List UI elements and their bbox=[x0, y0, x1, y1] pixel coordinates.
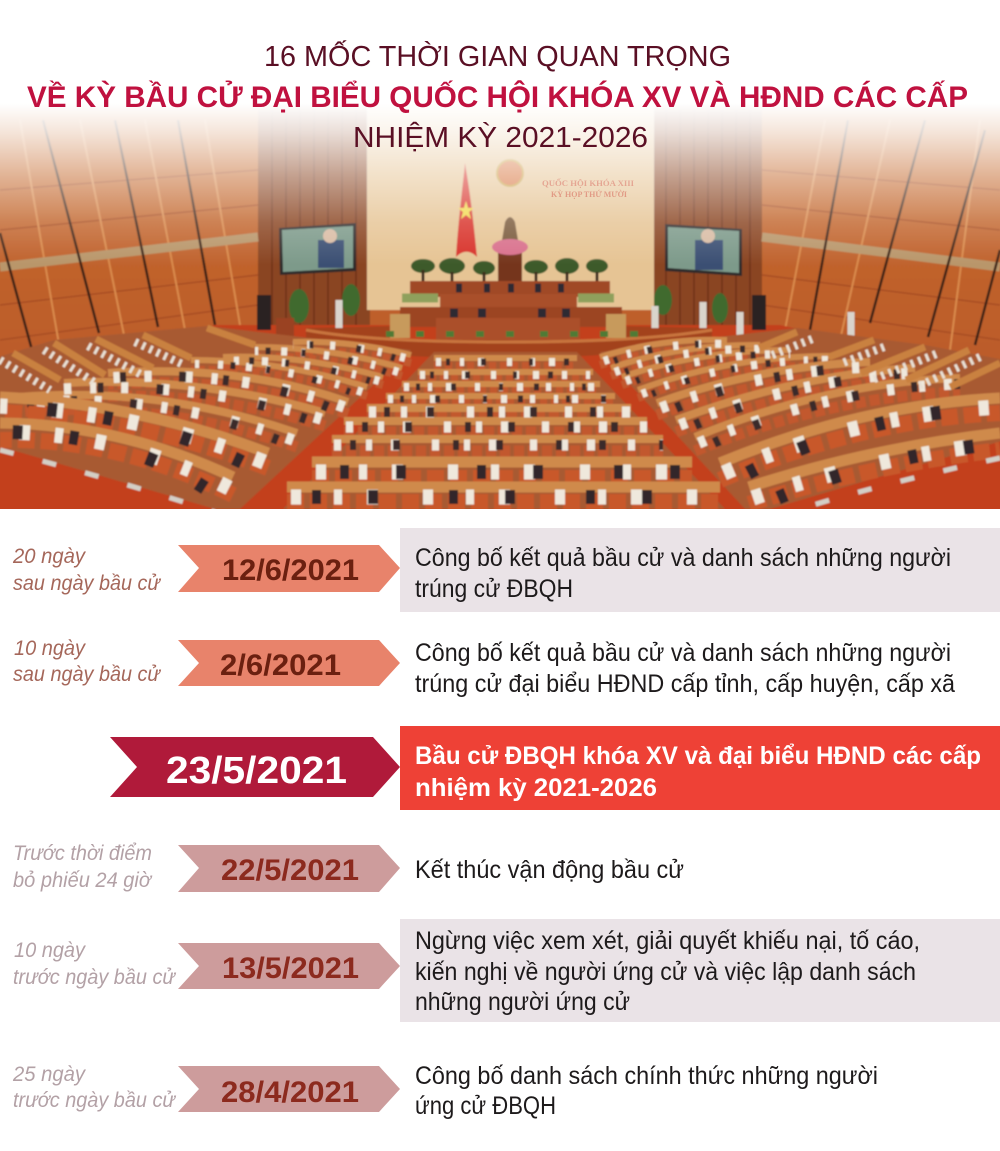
date arrow bbox=[178, 640, 400, 686]
title: VỀ KỲ BẦU CỬ ĐẠI BIỂU QUỐC HỘI KHÓA XV VÀ HĐND CÁC CẤP bbox=[27, 80, 968, 114]
date: 23/5/2021 bbox=[166, 750, 347, 792]
row note: 25 ngày bbox=[12, 1063, 86, 1086]
row note: Trước thời điểm bbox=[13, 842, 152, 865]
description: Công bố danh sách chính thức những người bbox=[415, 1062, 878, 1090]
national emblem bbox=[497, 160, 523, 186]
description bbox=[415, 544, 951, 603]
bust and pedestal bbox=[492, 217, 528, 291]
title: 16 MỐC THỜI GIAN QUAN TRỌNG bbox=[264, 39, 731, 73]
description panel bbox=[400, 919, 1000, 1022]
date arrow bbox=[178, 545, 400, 592]
front floor and bottom seats bbox=[0, 450, 1000, 512]
date: 12/6/2021 bbox=[222, 554, 359, 587]
date arrow bbox=[178, 943, 400, 989]
row note bbox=[13, 842, 153, 892]
description: những người ứng cử bbox=[415, 988, 630, 1016]
title: NHIỆM KỲ 2021-2026 bbox=[353, 121, 648, 154]
date: 28/4/2021 bbox=[221, 1076, 359, 1109]
row note: 20 ngày bbox=[12, 545, 86, 568]
row note: 10 ngày bbox=[14, 939, 86, 962]
description: Bầu cử ĐBQH khóa XV và đại biểu HĐND các cấp bbox=[415, 742, 981, 770]
date arrow bbox=[178, 1066, 400, 1112]
timeline row: 28/4/2021 bbox=[12, 1062, 878, 1120]
white fade over photo top bbox=[0, 0, 1000, 265]
row note: 10 ngày bbox=[14, 637, 86, 660]
description: nhiệm kỳ 2021-2026 bbox=[415, 774, 657, 802]
seating blocks bbox=[0, 326, 1000, 509]
row note bbox=[12, 1063, 177, 1112]
potted plants bbox=[411, 258, 608, 282]
left screen bbox=[279, 223, 356, 275]
date arrow bbox=[178, 845, 400, 892]
row note: trước ngày bầu cử bbox=[13, 1089, 177, 1112]
description bbox=[415, 639, 955, 698]
description: Ngừng việc xem xét, giải quyết khiếu nại, tố cáo, bbox=[415, 927, 920, 955]
description: Công bố kết quả bầu cử và danh sách những người bbox=[415, 639, 951, 667]
description bbox=[415, 1062, 878, 1120]
highlight panel bbox=[400, 726, 1000, 810]
row note: trước ngày bầu cử bbox=[13, 966, 177, 989]
outer raised desks bbox=[0, 328, 1000, 390]
date: 22/5/2021 bbox=[221, 854, 359, 887]
row note: bỏ phiếu 24 giờ bbox=[13, 869, 153, 892]
floor bbox=[0, 325, 1000, 515]
date: 2/6/2021 bbox=[220, 649, 341, 682]
description: trúng cử ĐBQH bbox=[415, 575, 573, 603]
title bbox=[27, 39, 968, 154]
date: 13/5/2021 bbox=[222, 952, 359, 985]
description: kiến nghị về người ứng cử và việc lập danh sách bbox=[415, 958, 916, 986]
description: Kết thúc vận động bầu cử bbox=[415, 856, 684, 884]
row note: sau ngày bầu cử bbox=[13, 572, 162, 595]
description: trúng cử đại biểu HĐND cấp tỉnh, cấp huyện, cấp xã bbox=[415, 670, 955, 698]
right screen bbox=[665, 224, 742, 276]
hall walls bbox=[0, 110, 1000, 360]
row note bbox=[12, 545, 162, 595]
wall caption bbox=[542, 178, 635, 199]
middle rows bbox=[19, 362, 960, 451]
timeline row: 22/5/2021 bbox=[13, 842, 684, 892]
description bbox=[415, 742, 981, 802]
wall caption: KỲ HỌP THỨ MƯỜI bbox=[551, 189, 628, 199]
flag bbox=[456, 163, 477, 257]
date arrow bbox=[110, 737, 400, 797]
description panel bbox=[400, 528, 1000, 612]
wall caption: QUỐC HỘI KHÓA XIII bbox=[542, 178, 635, 188]
row note bbox=[13, 939, 177, 989]
timeline row: 2/6/2021 bbox=[13, 637, 955, 698]
large rows bbox=[0, 397, 1000, 504]
description: ứng cử ĐBQH bbox=[415, 1092, 556, 1120]
timeline row: 12/6/2021 bbox=[12, 528, 1000, 612]
side plants, speakers and standing staff bbox=[257, 284, 851, 340]
row note: sau ngày bầu cử bbox=[13, 663, 162, 686]
description bbox=[415, 927, 920, 1016]
row note bbox=[13, 637, 162, 686]
timeline row: 13/5/2021 bbox=[13, 919, 1000, 1022]
timeline row: election day 23/5/2021 bbox=[110, 726, 1000, 810]
description: Công bố kết quả bầu cử và danh sách những người bbox=[415, 544, 951, 572]
presidium tiers bbox=[306, 281, 712, 358]
small rows bbox=[191, 340, 830, 403]
photo: National Assembly hall bbox=[0, 90, 1000, 515]
